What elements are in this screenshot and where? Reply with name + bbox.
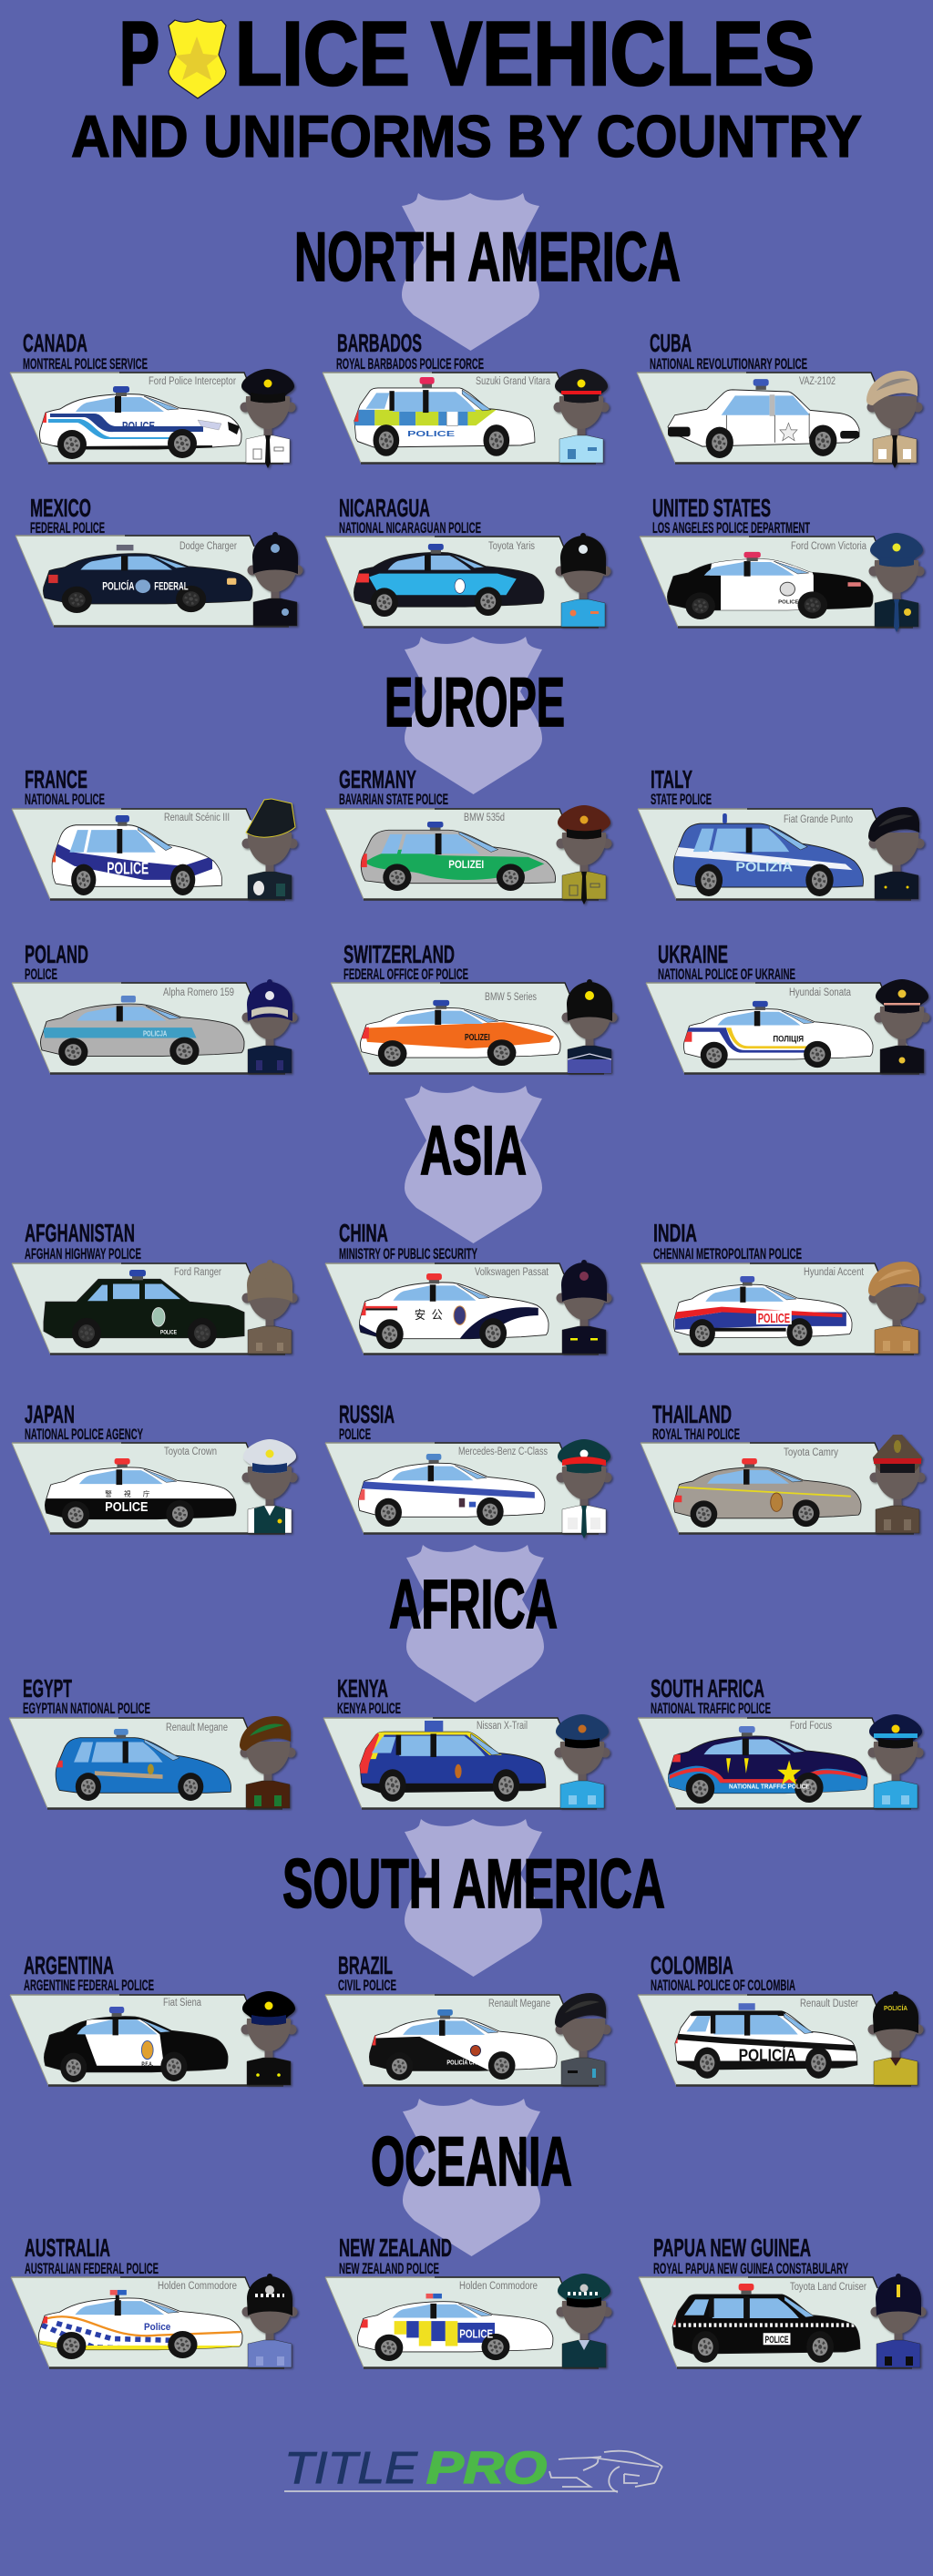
car: Alpha Romero 159: POLICJA xyxy=(143,1029,168,1038)
panel: Japan xyxy=(12,1400,297,1534)
car: Renault Scenic III xyxy=(51,815,222,895)
police force: NEW ZEALAND POLICE xyxy=(339,2260,439,2277)
car: Ford Crown Victoria: POLICE xyxy=(778,600,799,605)
icon: yellow police badge xyxy=(169,19,226,98)
vehicle model: Hyundai Sonata xyxy=(789,987,851,998)
police force: NATIONAL POLICE OF UKRAINE xyxy=(658,966,795,983)
logo word PRO: PRO xyxy=(426,2444,547,2493)
police force: FEDERAL POLICE xyxy=(30,519,105,537)
car: Renault Duster: POLICÍA xyxy=(739,2046,796,2065)
panel: Mexico xyxy=(15,494,302,627)
car: Ford Focus xyxy=(668,1726,867,1804)
country name: RUSSIA xyxy=(339,1400,395,1428)
panel: Colombia xyxy=(638,1951,924,2086)
police force: NATIONAL POLICE AGENCY xyxy=(25,1426,143,1443)
vehicle model: Hyundai Accent xyxy=(804,1267,865,1278)
officer: France xyxy=(242,799,297,899)
police force: CIVIL POLICE xyxy=(338,1977,396,1994)
car: Ford Ranger: POLICE xyxy=(160,1329,177,1336)
car: Toyota Crown: 庁 xyxy=(143,1488,150,1498)
officer: Thailand xyxy=(869,1435,926,1533)
panel: Ukraine xyxy=(646,940,929,1073)
police force: MINISTRY OF PUBLIC SECURITY xyxy=(339,1245,477,1262)
panel: India xyxy=(641,1219,924,1354)
car: Renault Megane police: POLICÍA CIVIL xyxy=(446,2059,483,2067)
officer: Germany xyxy=(556,805,612,905)
officer: Russia xyxy=(556,1439,612,1538)
card background xyxy=(323,1718,597,1809)
country name: ARGENTINA xyxy=(24,1951,114,1979)
country name: INDIA xyxy=(653,1219,697,1247)
police force: FEDERAL OFFICE OF POLICE xyxy=(343,966,468,983)
car: Volkswagen Passat: 公 xyxy=(432,1308,443,1322)
section heading: South America xyxy=(282,1819,665,1977)
police force: EGYPTIAN NATIONAL POLICE xyxy=(23,1700,150,1717)
country name: PAPUA NEW GUINEA xyxy=(653,2234,811,2262)
vehicle model: Toyota Camry xyxy=(784,1447,838,1458)
country name: ITALY xyxy=(651,765,692,793)
police force: NATIONAL REVOLUTIONARY POLICE xyxy=(650,355,807,373)
police force: ROYAL BARBADOS POLICE FORCE xyxy=(336,355,484,373)
officer: Brazil xyxy=(555,1993,610,2085)
vehicle model: Alpha Romero 159 xyxy=(163,987,234,998)
car: Volkswagen Passat xyxy=(359,1273,549,1349)
card background xyxy=(325,1443,599,1534)
card background xyxy=(646,983,919,1073)
panel: Afghanistan xyxy=(12,1219,297,1354)
card background xyxy=(637,373,910,463)
country name: COLOMBIA xyxy=(651,1951,733,1979)
logo: Title Pro xyxy=(284,2444,662,2493)
country name: FRANCE xyxy=(25,765,87,793)
card background xyxy=(10,1995,283,2086)
panel: Brazil xyxy=(325,1951,610,2086)
car: Holden Commodore xyxy=(38,2290,242,2359)
car: Dodge Charger: POLICÍA xyxy=(102,579,134,592)
panel: China xyxy=(325,1219,612,1354)
vehicle model: Fiat Grande Punto xyxy=(784,814,853,825)
section heading: South America: SOUTH AMERICA xyxy=(282,1845,665,1923)
card background xyxy=(12,809,285,900)
panel: Canada xyxy=(10,329,295,468)
vehicle model: Holden Commodore xyxy=(158,2281,237,2292)
car: Mercedes-Benz C-Class xyxy=(358,1454,545,1527)
card background xyxy=(641,1263,914,1354)
card background xyxy=(12,1443,285,1534)
panel: Barbados xyxy=(323,329,609,463)
police force: BAVARIAN STATE POLICE xyxy=(339,791,448,808)
card background xyxy=(325,1263,599,1354)
country name: EGYPT xyxy=(23,1674,72,1702)
car: Volkswagen Passat: 安 xyxy=(415,1308,425,1322)
panel: Italy xyxy=(638,765,924,900)
title line one continued: LICE VEHICLES xyxy=(235,3,815,104)
police force: STATE POLICE xyxy=(651,791,712,808)
vehicle model: Toyota Yaris xyxy=(488,541,535,552)
vehicle model: Toyota Crown xyxy=(164,1446,217,1457)
car: Ford Police Interceptor xyxy=(39,386,241,459)
car: Toyota Crown: POLICE xyxy=(105,1499,149,1515)
card background xyxy=(10,373,283,463)
country name: GERMANY xyxy=(339,765,416,793)
panel: Egypt xyxy=(9,1674,295,1809)
vehicle model: Ford Ranger xyxy=(174,1267,221,1278)
card background xyxy=(9,1718,282,1809)
logo word TITLE: TITLE xyxy=(284,2444,418,2493)
officer: Cuba xyxy=(866,371,922,468)
car: Hyundai Accent: POLICE xyxy=(758,1310,790,1325)
police force: NATIONAL TRAFFIC POLICE xyxy=(651,1700,771,1717)
panel: Cuba xyxy=(637,329,922,468)
country name: SWITZERLAND xyxy=(343,940,455,968)
car: BMW 535d: POLIZEI xyxy=(448,858,484,871)
panel: New Zealand xyxy=(325,2234,612,2368)
officer: Mexico xyxy=(248,532,302,626)
vehicle model: Suzuki Grand Vitara xyxy=(476,376,550,387)
vehicle model: Renault Duster xyxy=(800,1998,858,2009)
panel: Thailand xyxy=(641,1400,926,1534)
officer: Japan xyxy=(242,1439,297,1533)
section heading: North America xyxy=(294,193,681,351)
car: Alpha Romero 159 xyxy=(40,996,244,1066)
section heading: North America: NORTH AMERICA xyxy=(294,219,681,296)
officer: Italy xyxy=(868,807,924,899)
car: Holden Commodore: Police xyxy=(144,2321,171,2333)
car: Hyundai Accent xyxy=(673,1276,852,1347)
car: Toyota Yaris xyxy=(354,544,544,617)
vehicle model: Fiat Siena xyxy=(163,1998,201,2009)
panel: France xyxy=(12,765,297,900)
card background xyxy=(325,1995,599,2086)
card background xyxy=(639,2277,912,2368)
vehicle model: Mercedes-Benz C-Class xyxy=(458,1446,548,1457)
vehicle model: Volkswagen Passat xyxy=(475,1267,549,1278)
card background xyxy=(12,1263,285,1354)
country name: CUBA xyxy=(650,329,692,357)
officer: Papua New Guinea xyxy=(871,2274,926,2367)
section heading: Oceania: OCEANIA xyxy=(371,2123,572,2201)
car: Toyota Crown: 視 xyxy=(124,1489,131,1498)
section heading: Asia: ASIA xyxy=(420,1112,527,1190)
section heading: Oceania xyxy=(371,2099,572,2256)
vehicle model: Ford Police Interceptor xyxy=(149,376,236,387)
section heading: Europe: EUROPE xyxy=(384,664,565,741)
police force: MONTREAL POLICE SERVICE xyxy=(23,355,148,373)
country name: UNITED STATES xyxy=(652,494,771,522)
panel: South Africa xyxy=(638,1674,924,1809)
card background xyxy=(15,536,289,627)
country name: NICARAGUA xyxy=(339,494,430,522)
officer: China xyxy=(556,1260,612,1354)
logo car outline and underline xyxy=(284,2451,662,2492)
panel: Kenya xyxy=(323,1674,610,1809)
card background xyxy=(640,537,913,627)
panel: United States xyxy=(640,494,924,632)
section heading: Africa: AFRICA xyxy=(389,1566,558,1643)
police force: KENYA POLICE xyxy=(337,1700,401,1717)
car: Ford Police Interceptor: POLICE xyxy=(122,419,155,433)
police force: ARGENTINE FEDERAL POLICE xyxy=(24,1977,154,1994)
officer: Canada xyxy=(241,369,295,468)
car: Fiat Grande Punto: POLIZIA xyxy=(735,859,793,874)
officer: Afghanistan xyxy=(242,1260,297,1354)
car: Nissan X-Trail xyxy=(359,1721,546,1802)
card background xyxy=(331,983,604,1073)
country name: CHINA xyxy=(339,1219,388,1247)
card background xyxy=(323,373,596,463)
officer: India xyxy=(868,1262,924,1354)
card background xyxy=(325,809,599,900)
country name: UKRAINE xyxy=(658,940,728,968)
country name: MEXICO xyxy=(30,494,91,522)
car: Hyundai Sonata xyxy=(683,1001,873,1068)
country name: POLAND xyxy=(25,940,88,968)
vehicle model: BMW 535d xyxy=(464,813,505,823)
card background xyxy=(638,809,911,900)
car: Ford Crown Victoria xyxy=(668,552,873,619)
vehicle model: Nissan X-Trail xyxy=(477,1721,528,1732)
officer: Poland xyxy=(242,979,297,1073)
car: Dodge Charger: FEDERAL xyxy=(154,580,189,592)
card background xyxy=(325,2277,599,2368)
officer: Australia xyxy=(242,2274,297,2367)
card background xyxy=(11,2277,284,2368)
country name: BARBADOS xyxy=(337,329,422,357)
police force: POLICE xyxy=(339,1426,371,1443)
country name: KENYA xyxy=(337,1674,388,1702)
police force: ROYAL THAI POLICE xyxy=(652,1426,740,1443)
police force: NATIONAL POLICE OF COLOMBIA xyxy=(651,1977,795,1994)
vehicle model: Ford Crown Victoria xyxy=(791,541,866,552)
country name: SOUTH AFRICA xyxy=(651,1674,764,1702)
car: VAZ-2102 xyxy=(668,379,859,458)
car: Fiat Siena xyxy=(44,2007,228,2082)
panel: Germany xyxy=(325,765,612,905)
car: Renault Megane xyxy=(55,1729,231,1801)
country name: NEW ZEALAND xyxy=(339,2234,452,2262)
officer: Colombia xyxy=(867,1991,924,2085)
police force: CHENNAI METROPOLITAN POLICE xyxy=(653,1245,802,1262)
title line one: P xyxy=(119,3,159,104)
country name: JAPAN xyxy=(25,1400,75,1428)
car: Suzuki Grand Vitara xyxy=(354,377,535,456)
car: Fiat Grande Punto xyxy=(672,813,863,896)
car: Holden Commodore police: POLICE xyxy=(459,2327,493,2340)
officer: Egypt xyxy=(240,1716,295,1808)
vehicle model: Holden Commodore xyxy=(459,2281,538,2292)
panel: Papua New Guinea xyxy=(639,2234,926,2368)
vehicle model: VAZ-2102 xyxy=(799,376,836,387)
country name: AUSTRALIA xyxy=(25,2234,110,2262)
country name: BRAZIL xyxy=(338,1951,393,1979)
car: Fiat Siena: P.F.A. xyxy=(141,2062,153,2068)
card background xyxy=(641,1443,914,1534)
vehicle model: Renault Megane xyxy=(488,1998,550,2009)
panel: Switzerland xyxy=(331,940,618,1073)
country name: AFGHANISTAN xyxy=(25,1219,135,1247)
vehicle model: Renault Megane xyxy=(166,1722,228,1733)
police force: NATIONAL POLICE xyxy=(25,791,105,808)
vehicle model: Dodge Charger xyxy=(179,541,237,552)
officer: Colombia: POLICÍA xyxy=(884,2004,907,2012)
car: BMW 5 Series: POLIZEI xyxy=(465,1033,490,1043)
car: Holden Commodore police xyxy=(357,2294,553,2361)
card background xyxy=(12,983,285,1073)
car: Toyota Land Cruiser xyxy=(672,2284,860,2363)
panel: Russia xyxy=(325,1400,612,1538)
card background xyxy=(325,537,599,627)
police force: AFGHAN HIGHWAY POLICE xyxy=(25,1245,141,1262)
car: Toyota Crown: 警 xyxy=(105,1488,112,1498)
officer: Kenya xyxy=(554,1714,610,1808)
country name: THAILAND xyxy=(652,1400,732,1428)
car: Toyota Land Cruiser: POLICE xyxy=(765,2336,789,2346)
officer: South Africa xyxy=(867,1714,924,1808)
panel: Australia xyxy=(11,2234,297,2368)
car: Ford Focus: NATIONAL TRAFFIC POLICE xyxy=(729,1783,810,1790)
vehicle model: Ford Focus xyxy=(790,1721,832,1732)
vehicle model: BMW 5 Series xyxy=(485,992,537,1003)
country name: CANADA xyxy=(23,329,87,357)
car: Toyota Camry xyxy=(673,1458,861,1528)
car: Dodge Charger xyxy=(44,545,252,613)
card background xyxy=(638,1718,911,1809)
police force: AUSTRALIAN FEDERAL POLICE xyxy=(25,2260,159,2277)
car: Suzuki Grand Vitara: POLICE xyxy=(407,429,455,438)
officer: United States xyxy=(869,533,924,632)
car: Renault Duster xyxy=(674,2003,857,2079)
officer: Ukraine xyxy=(875,979,929,1073)
title line two: AND UNIFORMS BY COUNTRY xyxy=(71,103,862,169)
card background xyxy=(638,1995,911,2086)
police force: LOS ANGELES POLICE DEPARTMENT xyxy=(652,519,810,537)
car: Ford Ranger xyxy=(44,1270,244,1348)
car: BMW 535d xyxy=(360,822,556,891)
car: Renault Scenic III: POLICE xyxy=(107,860,149,878)
officer: Switzerland xyxy=(561,979,618,1073)
police force: NATIONAL NICARAGUAN POLICE xyxy=(339,519,481,537)
panel: Nicaragua xyxy=(325,494,610,627)
car: Hyundai Sonata: ПОЛІЦІЯ xyxy=(773,1035,804,1044)
officer: Argentina xyxy=(241,1991,297,2085)
panel: Argentina xyxy=(10,1951,297,2086)
officer: Barbados xyxy=(554,369,609,463)
car: Renault Megane police xyxy=(369,2009,557,2080)
section heading: Asia xyxy=(405,1086,542,1243)
car: Toyota Crown xyxy=(45,1458,236,1528)
officer: Nicaragua xyxy=(556,533,610,627)
panel: Poland xyxy=(12,940,297,1073)
officer: New Zealand xyxy=(556,2274,612,2367)
vehicle model: Renault Scénic III xyxy=(164,813,230,823)
title xyxy=(71,3,862,169)
section heading: Africa xyxy=(389,1545,558,1702)
section heading: Europe xyxy=(384,637,565,794)
car: BMW 5 Series xyxy=(360,1000,560,1067)
police force: POLICE xyxy=(25,966,57,983)
vehicle model: Toyota Land Cruiser xyxy=(790,2282,866,2293)
